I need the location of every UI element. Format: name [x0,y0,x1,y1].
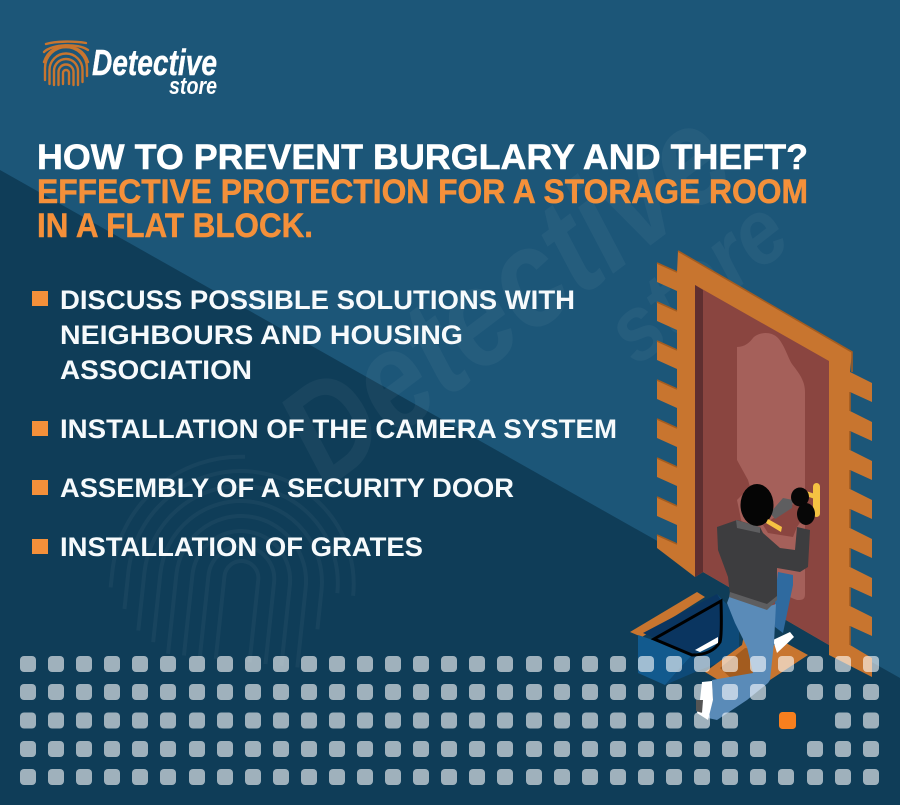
item: discuss solutions: ASSOCIATION [60,355,252,385]
item: grates: INSTALLATION OF GRATES [60,532,423,562]
watermark: brand name: Detective [250,76,759,514]
front leg [708,595,776,720]
list of measures [32,285,617,562]
burglar torso [717,520,810,607]
raised forearm [770,498,793,519]
title: HOW TO PREVENT BURGLARY AND THEFT? [37,137,808,177]
floor toolbag [630,592,739,685]
item: camera system: INSTALLATION OF THE CAMERA SYSTEM [60,414,617,444]
title [37,137,808,245]
gloves [791,488,815,525]
rear shoe [773,632,794,653]
step tray [705,630,808,690]
door handle [803,483,820,517]
door shadow strip [695,285,703,577]
illustration: burglar at door [630,251,872,720]
item: security door: ASSEMBLY OF A SECURITY DOOR [60,473,514,503]
rear leg [775,572,793,633]
collar [736,520,760,533]
tool [766,519,782,532]
title: IN A FLAT BLOCK. [37,207,313,245]
front shoe [696,681,713,720]
item: discuss solutions: NEIGHBOURS AND HOUSING [60,320,463,350]
logo subtitle: store [169,73,217,100]
title: EFFECTIVE PROTECTION FOR A STORAGE ROOM [37,173,808,211]
waistband [729,592,777,610]
head in balaclava [740,484,774,526]
door leaf [695,285,829,645]
watermark: fingerprint [104,444,366,672]
watermark: brand name: store [587,179,807,383]
door panel [737,333,805,600]
logo [44,42,217,100]
sleeve shadow on door [763,500,815,537]
logo wordmark: Detective [92,42,217,83]
item: discuss solutions [32,285,575,385]
door frame [657,251,872,677]
orange accent dot [779,712,796,729]
item: discuss solutions: DISCUSS POSSIBLE SOLUTIONS WITH [60,285,575,315]
dot grid [20,656,879,785]
icon: fingerprint [44,42,88,85]
